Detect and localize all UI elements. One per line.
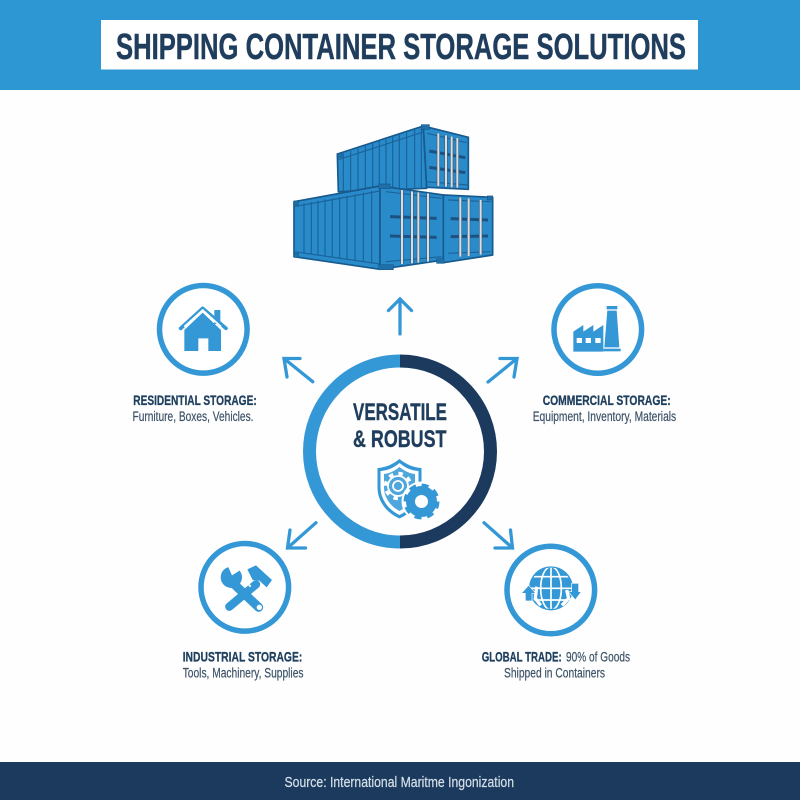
panel: industrial storage <box>183 544 304 681</box>
commercial detail: Equipment, Inventory, Materials <box>533 409 676 424</box>
panel: residential storage <box>132 286 257 424</box>
icon: house <box>181 308 226 351</box>
arrow: up to containers <box>388 299 412 334</box>
industrial label: INDUSTRIAL STORAGE: <box>183 649 302 665</box>
global trade label: GLOBAL TRADE: <box>482 649 562 665</box>
panel: global trade <box>482 546 630 681</box>
arrow: to commercial storage <box>488 358 517 382</box>
icon: globe with arrows <box>521 567 581 610</box>
icon: wrench and hammer <box>221 560 272 610</box>
arrow: to global trade <box>484 523 512 548</box>
hub text: & ROBUST <box>353 426 447 453</box>
global trade detail: Shipped in Containers <box>504 666 605 681</box>
icon: factory <box>573 306 621 352</box>
icon: shield with gears <box>378 459 442 522</box>
arrow: to industrial storage <box>288 523 316 548</box>
arrow: to residential storage <box>284 358 313 382</box>
industrial detail: Tools, Machinery, Supplies <box>183 666 304 681</box>
ring <box>310 361 490 542</box>
commercial label: COMMERCIAL STORAGE: <box>543 392 671 408</box>
header band <box>0 0 800 90</box>
source: Source: International Maritme Ingonization <box>284 774 514 791</box>
residential detail: Furniture, Boxes, Vehicles. <box>132 409 254 424</box>
icon: stacked shipping containers <box>294 125 493 270</box>
residential label: RESIDENTIAL STORAGE: <box>133 392 257 408</box>
hub text <box>353 399 447 453</box>
hub text: VERSATILE <box>353 399 447 426</box>
panel: commercial storage <box>533 286 676 424</box>
central hub <box>310 361 490 542</box>
footer band <box>0 762 800 800</box>
global trade label: 90% of Goods <box>566 650 630 665</box>
